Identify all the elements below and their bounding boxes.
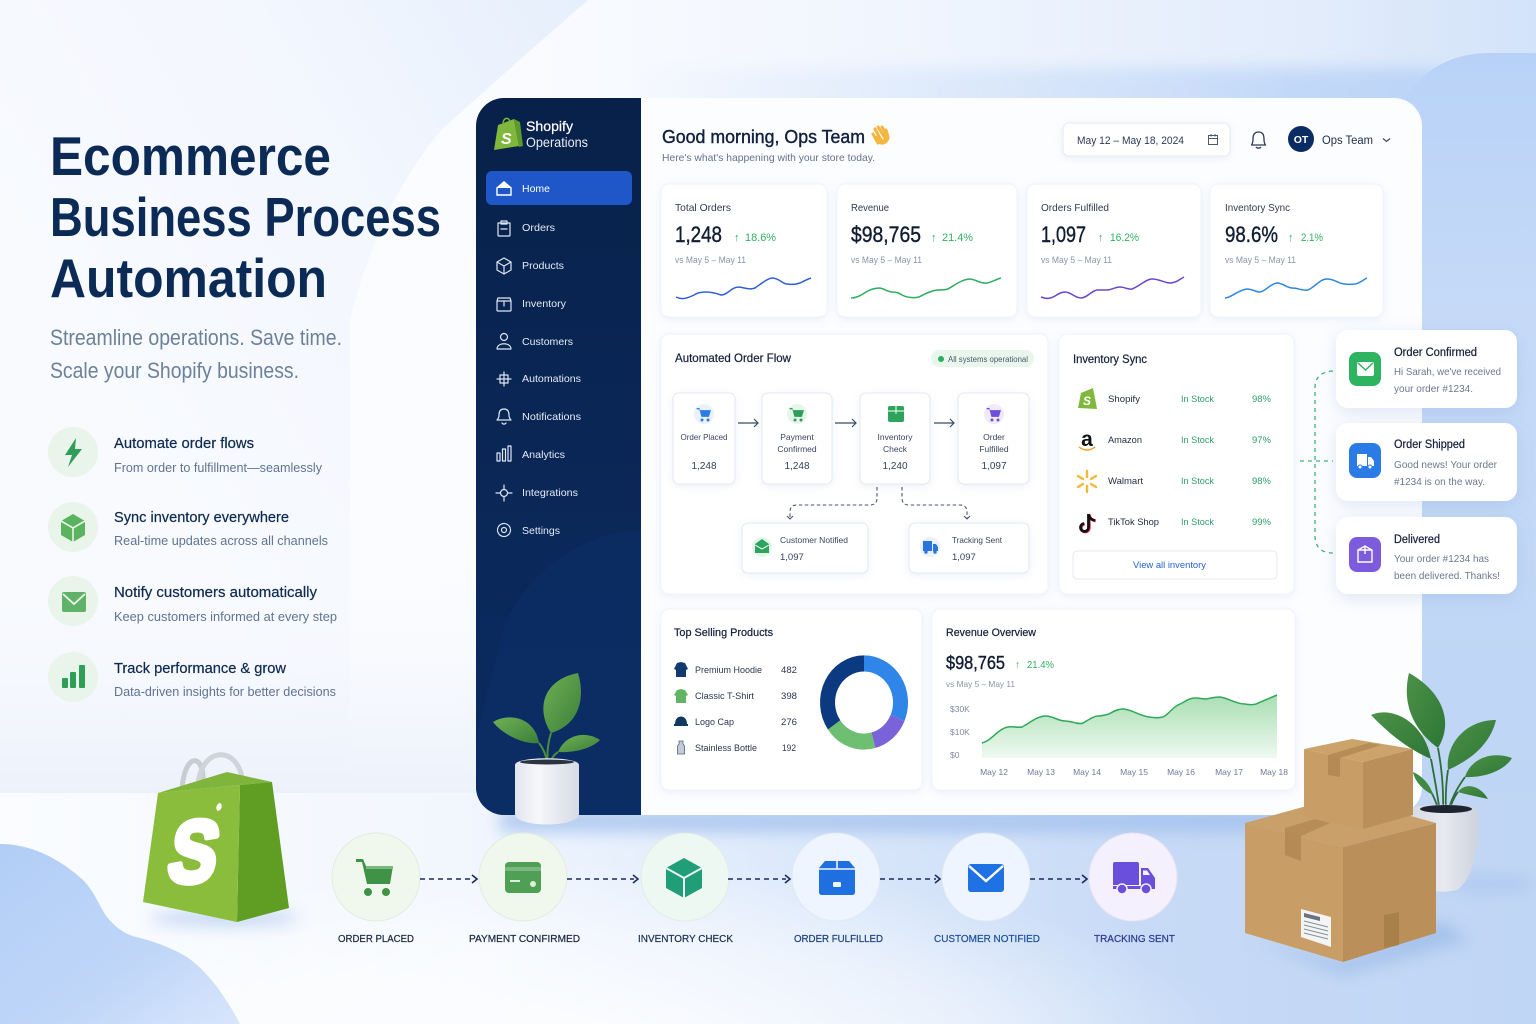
benefit: sync inventory: [48, 502, 328, 552]
product: cap: 276: [781, 717, 797, 727]
panel: automated order flow: [661, 334, 1048, 594]
benefit: automate order flows: [48, 427, 322, 477]
donut chart: [828, 663, 901, 742]
panel: revenue overview: [932, 609, 1295, 790]
user menu: OT: [1294, 134, 1309, 146]
row: amazon: 97%: [1252, 435, 1272, 446]
arrow: [880, 875, 940, 883]
KPI card: revenue: 21.4%: [942, 232, 973, 244]
row: shopify: 98%: [1252, 394, 1272, 405]
subtitle: Streamline operations. Save time.: [50, 325, 342, 350]
panel: revenue overview: vs May 5 – May 11: [946, 679, 1015, 689]
KPI card: inventory sync: Inventory Sync: [1225, 202, 1290, 214]
product: bottle: [678, 741, 796, 754]
step: order fulfilled: Fulfilled: [979, 444, 1009, 454]
sparkline: [1225, 278, 1367, 298]
product: cap: Logo Cap: [695, 717, 734, 727]
step: inventory check: Check: [883, 444, 908, 454]
sparkline: [1041, 277, 1184, 298]
potted plant in sidebar: [493, 673, 600, 824]
dashed branch arrows: [787, 487, 970, 519]
y axis labels: $0: [950, 750, 960, 760]
panel: revenue overview: ↑: [1015, 659, 1020, 671]
KPI card: revenue: vs May 5 – May 11: [851, 255, 922, 265]
notification: delivered: Your order #1234 has: [1394, 553, 1489, 565]
potted plant right: [1371, 673, 1536, 892]
step: order fulfilled: Order: [983, 432, 1005, 442]
result: tracking sent: Tracking Sent: [952, 535, 1003, 545]
title: [50, 125, 441, 309]
user menu: Ops Team: [1322, 135, 1373, 147]
benefit list: [48, 427, 337, 702]
greeting header: Here's what's happening with your store today.: [662, 152, 875, 164]
nav: other items: Automations: [522, 373, 581, 385]
sparkline: [676, 278, 811, 299]
notification: order shipped: [1336, 423, 1517, 501]
greeting header: [662, 126, 888, 164]
row: shopify: S: [1083, 394, 1091, 408]
benefit: sync inventory: Real-time updates across all channels: [114, 533, 328, 548]
title: Ecommerce: [50, 125, 331, 187]
KPI card: total orders: Total Orders: [675, 202, 731, 214]
nav: other items: [522, 222, 581, 537]
KPI card: revenue: $98,765: [851, 222, 921, 247]
title: Automation: [50, 247, 327, 309]
area chart: [982, 695, 1277, 758]
KPI card: total orders: 1,248: [675, 222, 722, 247]
result: tracking sent: [909, 523, 1029, 573]
x axis labels: May 17: [1215, 767, 1243, 777]
nav: other items: Analytics: [522, 449, 565, 461]
result: tracking sent: 1,097: [952, 552, 976, 563]
subtitle: Scale your Shopify business.: [50, 358, 299, 383]
y axis labels: $10K: [950, 727, 970, 737]
row: tiktok: In Stock: [1181, 517, 1214, 528]
step: inventory check: [860, 393, 930, 484]
greeting header: Good morning, Ops Team: [662, 126, 865, 147]
row: walmart: In Stock: [1181, 476, 1214, 487]
row: tiktok: TikTok Shop: [1108, 517, 1159, 528]
step: order placed: 1,248: [691, 461, 717, 472]
notification: order shipped: Order Shipped: [1394, 439, 1465, 451]
logo: Operations: [526, 134, 588, 150]
notification: delivered: been delivered. Thanks!: [1394, 570, 1500, 582]
KPI card: revenue: Revenue: [851, 202, 889, 214]
small box: [1304, 739, 1413, 829]
product: hoodie: 482: [781, 665, 797, 675]
logo: Shopify: [526, 118, 573, 134]
KPI card: orders fulfilled: 16.2%: [1110, 232, 1139, 244]
step: payment confirmed: Payment: [780, 432, 814, 442]
KPI card: inventory sync: 98.6%: [1225, 222, 1278, 247]
process step: tracking sent: TRACKING SENT: [1094, 933, 1176, 945]
x axis labels: May 14: [1073, 767, 1101, 777]
row: walmart: Walmart: [1108, 476, 1143, 487]
step: order placed: [673, 393, 735, 484]
x axis labels: May 18: [1260, 767, 1288, 777]
product: t-shirt: 398: [781, 691, 797, 701]
nav: other items: Customers: [522, 336, 573, 348]
status badge: All systems operational: [948, 355, 1028, 364]
process step: payment confirmed: PAYMENT CONFIRMED: [469, 933, 580, 945]
nav: other items: Notifications: [522, 411, 581, 423]
dashboard panel: [476, 98, 1422, 824]
product: t-shirt: [674, 689, 797, 703]
date range picker: May 12 – May 18, 2024: [1077, 135, 1184, 147]
benefit: track performance: Data-driven insights for better decisions: [114, 684, 336, 699]
sparkline: [851, 278, 1001, 298]
nav: other items: Integrations: [522, 487, 578, 499]
arrow: [567, 875, 638, 883]
KPI card: orders fulfilled: 1,097: [1041, 222, 1086, 247]
KPI card: inventory sync: vs May 5 – May 11: [1225, 255, 1296, 265]
product: bottle: 192: [782, 743, 796, 753]
KPI card: total orders: [661, 184, 827, 317]
process step: inventory check: INVENTORY CHECK: [638, 933, 733, 945]
process step: customer notified: [934, 833, 1040, 945]
step: payment confirmed: Confirmed: [777, 444, 817, 454]
benefit: automate order flows: Automate order flows: [114, 435, 254, 452]
arrow: [728, 875, 790, 883]
nav: other items: Orders: [522, 222, 555, 234]
row: tiktok: [1080, 514, 1272, 532]
arrow: [420, 875, 477, 883]
notification: order shipped: #1234 is on the way.: [1394, 476, 1485, 488]
shopify shopping bag: [143, 755, 300, 926]
panel: automated order flow: Automated Order Flow: [675, 351, 791, 365]
nav: other items: Products: [522, 260, 564, 272]
panel: top selling products: Top Selling Products: [674, 627, 773, 639]
benefit: notify customers: [48, 576, 337, 626]
row: tiktok: 99%: [1252, 517, 1272, 528]
row: shopify: Shopify: [1108, 394, 1140, 405]
panel: revenue overview: Revenue Overview: [946, 627, 1036, 639]
KPI card: orders fulfilled: Orders Fulfilled: [1041, 202, 1109, 214]
product: bottle: Stainless Bottle: [695, 743, 757, 753]
y axis labels: [950, 704, 970, 760]
button: view all inventory: View all inventory: [1133, 560, 1206, 571]
sidebar: [476, 98, 641, 824]
notification: delivered: Delivered: [1394, 534, 1440, 546]
KPI card: orders fulfilled: [1027, 184, 1201, 317]
result: customer notified: 1,097: [780, 552, 804, 563]
notification: order shipped: Good news! Your order: [1394, 459, 1497, 471]
KPI card: revenue: ↑: [931, 232, 936, 244]
process step: customer notified: CUSTOMER NOTIFIED: [934, 933, 1040, 945]
row: walmart: [1078, 471, 1272, 492]
step: payment confirmed: 1,248: [784, 461, 810, 472]
date range picker: [1063, 123, 1230, 156]
title: Business Process: [50, 186, 441, 248]
icon: bell: [1252, 132, 1266, 148]
benefit: sync inventory: Sync inventory everywhere: [114, 509, 289, 526]
process step: order placed: [332, 833, 420, 945]
nav: home (active): Home: [522, 183, 550, 195]
x axis labels: May 16: [1167, 767, 1195, 777]
product: t-shirt: Classic T-Shirt: [695, 691, 754, 701]
shopify shopping bag: S: [162, 803, 227, 901]
row: shopify: In Stock: [1181, 394, 1214, 405]
KPI card: revenue: [837, 184, 1017, 317]
product: hoodie: Premium Hoodie: [695, 665, 762, 675]
step: order fulfilled: [958, 393, 1029, 484]
step: order placed: Order Placed: [680, 432, 728, 442]
nav: other items: Settings: [522, 525, 560, 537]
nav: other items: Inventory: [522, 298, 567, 310]
panel: inventory sync: Inventory Sync: [1073, 352, 1147, 366]
x axis labels: May 15: [1120, 767, 1148, 777]
arrow: [1030, 875, 1087, 883]
row: amazon: [1079, 428, 1272, 451]
x axis labels: May 13: [1027, 767, 1055, 777]
result: customer notified: Customer Notified: [780, 535, 848, 545]
benefit: notify customers: Notify customers automatically: [114, 584, 317, 601]
step: inventory check: 1,240: [882, 461, 908, 472]
step: order fulfilled: 1,097: [981, 461, 1007, 472]
button: view all inventory: [1073, 551, 1277, 579]
step: inventory check: Inventory: [878, 432, 913, 442]
benefit: automate order flows: From order to fulfillment—seamlessly: [114, 460, 322, 475]
benefit: track performance: [48, 652, 336, 702]
row: shopify: [1078, 388, 1272, 409]
KPI card: total orders: vs May 5 – May 11: [675, 255, 746, 265]
notification: order confirmed: Order Confirmed: [1394, 347, 1477, 359]
notification: order confirmed: your order #1234.: [1394, 383, 1473, 395]
process step: tracking sent: [1089, 833, 1177, 945]
row: walmart: 98%: [1252, 476, 1272, 487]
x axis labels: May 12: [980, 767, 1008, 777]
benefit: track performance: Track performance & grow: [114, 660, 286, 677]
subtitle: [50, 325, 342, 383]
process step: order fulfilled: ORDER FULFILLED: [794, 933, 883, 945]
process step: order fulfilled: [792, 833, 883, 945]
panel: revenue overview: $98,765: [946, 653, 1005, 673]
nav icons: [496, 221, 512, 536]
KPI card: orders fulfilled: vs May 5 – May 11: [1041, 255, 1112, 265]
product: hoodie: [674, 662, 797, 677]
KPI card: inventory sync: [1210, 184, 1383, 317]
row: amazon: Amazon: [1108, 435, 1142, 446]
KPI card: inventory sync: 2.1%: [1301, 232, 1323, 244]
cardboard boxes: [1245, 739, 1470, 975]
KPI card: total orders: ↑: [734, 232, 740, 244]
nav: home (active): [486, 171, 632, 205]
y axis labels: $30K: [950, 704, 970, 714]
arrows between steps: [738, 419, 954, 427]
large box: [1245, 797, 1436, 962]
KPI card: total orders: 18.6%: [745, 232, 776, 244]
result: customer notified: [742, 523, 868, 573]
product: cap: [674, 716, 797, 727]
benefit: notify customers: Keep customers informed at every step: [114, 609, 337, 624]
panel: inventory sync: [1059, 334, 1294, 594]
logo: S: [501, 131, 512, 148]
notification: delivered: [1336, 517, 1517, 594]
process step: order placed: ORDER PLACED: [338, 933, 414, 945]
step: payment confirmed: [762, 393, 832, 484]
KPI card: orders fulfilled: ↑: [1098, 232, 1104, 244]
row: amazon: In Stock: [1181, 435, 1214, 446]
logo: [494, 118, 588, 150]
KPI card: inventory sync: ↑: [1288, 232, 1294, 244]
shipping label: [1301, 909, 1331, 947]
connector: notifications: [1300, 371, 1333, 553]
x axis labels: [980, 767, 1288, 777]
panel: revenue overview: 21.4%: [1027, 659, 1054, 671]
notification: order confirmed: Hi Sarah, we've received: [1394, 366, 1501, 378]
row: amazon: a: [1081, 428, 1093, 451]
status badge: [931, 350, 1034, 367]
process step: inventory check: [638, 833, 733, 945]
panel: top selling products: [661, 609, 922, 790]
icon: waving hand: [873, 127, 888, 143]
process step: payment confirmed: [469, 833, 580, 945]
notification: order confirmed: [1336, 330, 1517, 408]
user menu: [1288, 126, 1390, 152]
